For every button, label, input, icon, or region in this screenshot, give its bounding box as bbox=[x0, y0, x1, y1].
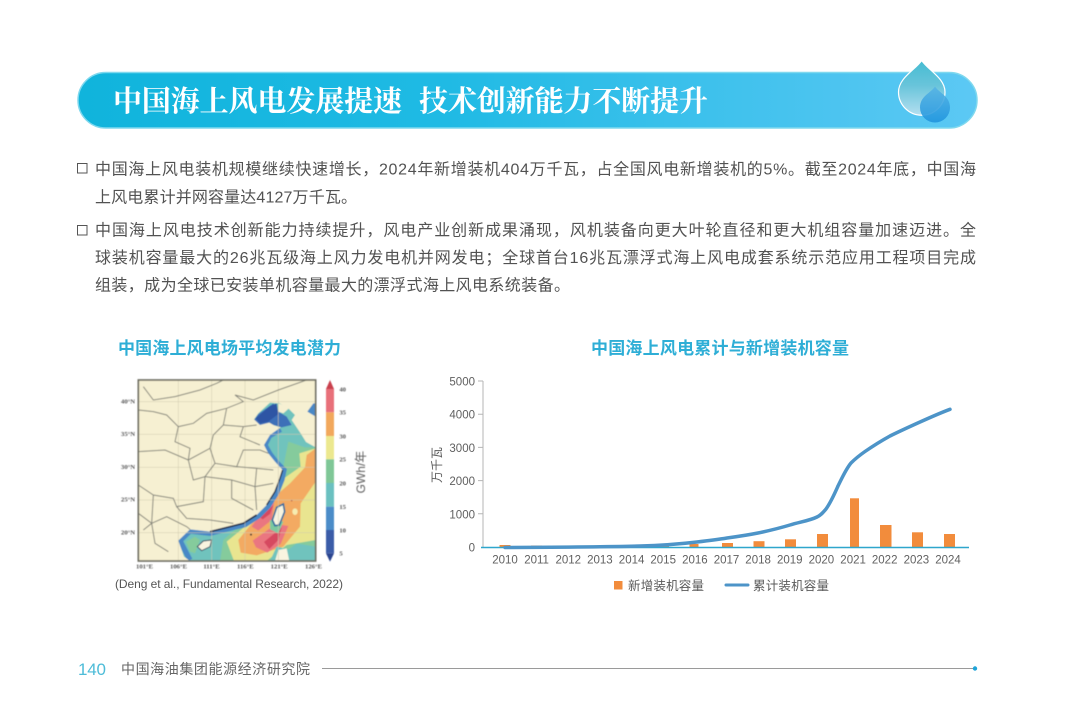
page number: 140 bbox=[78, 660, 106, 679]
bullet paragraph 1: 中国海上风电装机规模继续快速增长，2024年新增装机404万千瓦，占全国风电新增装机的5%。截至2024年底，中国海 bbox=[95, 160, 976, 178]
colour bar: 40 bbox=[339, 386, 347, 393]
y axis: 1000 bbox=[449, 509, 475, 521]
x axis year labels: 2022 bbox=[872, 554, 897, 566]
x axis year labels: 2010 bbox=[492, 554, 518, 566]
bullet paragraph 2 bbox=[78, 222, 976, 294]
map source caption: (Deng et al., Fundamental Research, 2022) bbox=[115, 577, 343, 591]
legend: 累计装机容量 bbox=[753, 578, 829, 593]
bullet paragraph 1: 上风电累计并网容量达4127万千瓦。 bbox=[95, 188, 357, 206]
latitude and longitude labels: 20°N bbox=[121, 529, 135, 536]
colour bar bbox=[326, 380, 347, 562]
title text: 技术创新能力不断提升 bbox=[419, 84, 708, 118]
bullet paragraph 2: 球装机容量最大的26兆瓦级海上风力发电机并网发电；全球首台16兆瓦漂浮式海上风电成套系统示范应用工程项目完成 bbox=[95, 248, 976, 267]
latitude and longitude labels: 30°N bbox=[121, 464, 135, 471]
colour bar: 10 bbox=[339, 527, 347, 534]
y axis unit: 万千瓦 bbox=[430, 447, 444, 483]
x axis year labels: 2020 bbox=[809, 554, 834, 566]
y axis: 5000 bbox=[449, 376, 475, 388]
latitude and longitude labels: 111°E bbox=[203, 564, 220, 571]
line: cumulative capacity bbox=[505, 409, 950, 548]
latitude and longitude labels: 25°N bbox=[121, 497, 135, 504]
latitude and longitude labels: 40°N bbox=[121, 398, 135, 405]
latitude and longitude labels: 121°E bbox=[271, 564, 288, 571]
colour bar: 15 bbox=[339, 504, 347, 511]
x axis year labels: 2014 bbox=[619, 554, 645, 566]
latitude and longitude labels: 126°E bbox=[305, 564, 323, 571]
legend bbox=[614, 578, 829, 593]
colour bar: 25 bbox=[339, 457, 347, 464]
x axis year labels: 2015 bbox=[650, 554, 676, 566]
x axis year labels: 2021 bbox=[840, 554, 866, 566]
x axis year labels: 2019 bbox=[777, 554, 803, 566]
latitude and longitude labels: 101°E bbox=[136, 564, 154, 571]
title text bbox=[113, 84, 708, 118]
y axis: 0 bbox=[469, 542, 475, 554]
x axis bbox=[481, 546, 969, 548]
coastal blue bbox=[180, 429, 284, 560]
footer bbox=[78, 660, 977, 679]
y axis: 4000 bbox=[449, 410, 475, 422]
islands bbox=[197, 540, 212, 551]
land bbox=[159, 400, 283, 561]
sea colour bands bbox=[181, 402, 316, 561]
x axis year labels: 2016 bbox=[682, 554, 708, 566]
colour bar unit: GWh/年 bbox=[354, 451, 368, 493]
province borders bbox=[138, 380, 307, 552]
latitude and longitude labels: 106°E bbox=[170, 564, 188, 571]
colour bar: 20 bbox=[339, 480, 347, 487]
x axis year labels: 2018 bbox=[745, 554, 771, 566]
latitude and longitude labels bbox=[121, 398, 323, 571]
bullet paragraph 2: 中国海上风电技术创新能力持续提升，风电产业创新成果涌现，风机装备向更大叶轮直径和更大机组容量加速迈进。全 bbox=[95, 222, 976, 240]
organisation name: 中国海油集团能源经济研究院 bbox=[121, 661, 310, 677]
x axis year labels bbox=[492, 554, 961, 566]
x axis year labels: 2017 bbox=[714, 554, 739, 566]
latitude and longitude labels: 116°E bbox=[237, 564, 254, 571]
y axis: 3000 bbox=[449, 443, 475, 455]
x axis year labels: 2011 bbox=[524, 554, 549, 566]
y axis: 2000 bbox=[449, 476, 475, 488]
bullet paragraph 2: 组装，成为全球已安装单机容量最大的漂浮式海上风电系统装备。 bbox=[95, 276, 570, 294]
x axis year labels: 2013 bbox=[587, 554, 613, 566]
heading: map: 中国海上风电场平均发电潜力 bbox=[118, 338, 341, 358]
title banner bbox=[78, 72, 977, 128]
chart: cumulative and new capacity bbox=[430, 376, 969, 593]
colour bar: 30 bbox=[339, 433, 347, 440]
map: offshore wind potential bbox=[121, 380, 368, 571]
colour bar: 5 bbox=[339, 551, 343, 558]
x axis year labels: 2024 bbox=[935, 554, 961, 566]
graticule bbox=[138, 380, 316, 561]
legend: 新增装机容量 bbox=[628, 578, 704, 593]
y axis bbox=[449, 376, 483, 554]
latitude and longitude labels: 35°N bbox=[121, 431, 135, 438]
bullet paragraph 1 bbox=[78, 160, 976, 206]
x axis year labels: 2023 bbox=[904, 554, 929, 566]
heading: chart: 中国海上风电累计与新增装机容量 bbox=[591, 338, 849, 358]
colour bar: 35 bbox=[339, 410, 347, 417]
title text: 中国海上风电发展提速 bbox=[113, 84, 403, 118]
x axis year labels: 2012 bbox=[556, 554, 581, 566]
icon: water drops bbox=[898, 60, 950, 123]
bars: new capacity bbox=[500, 498, 955, 547]
